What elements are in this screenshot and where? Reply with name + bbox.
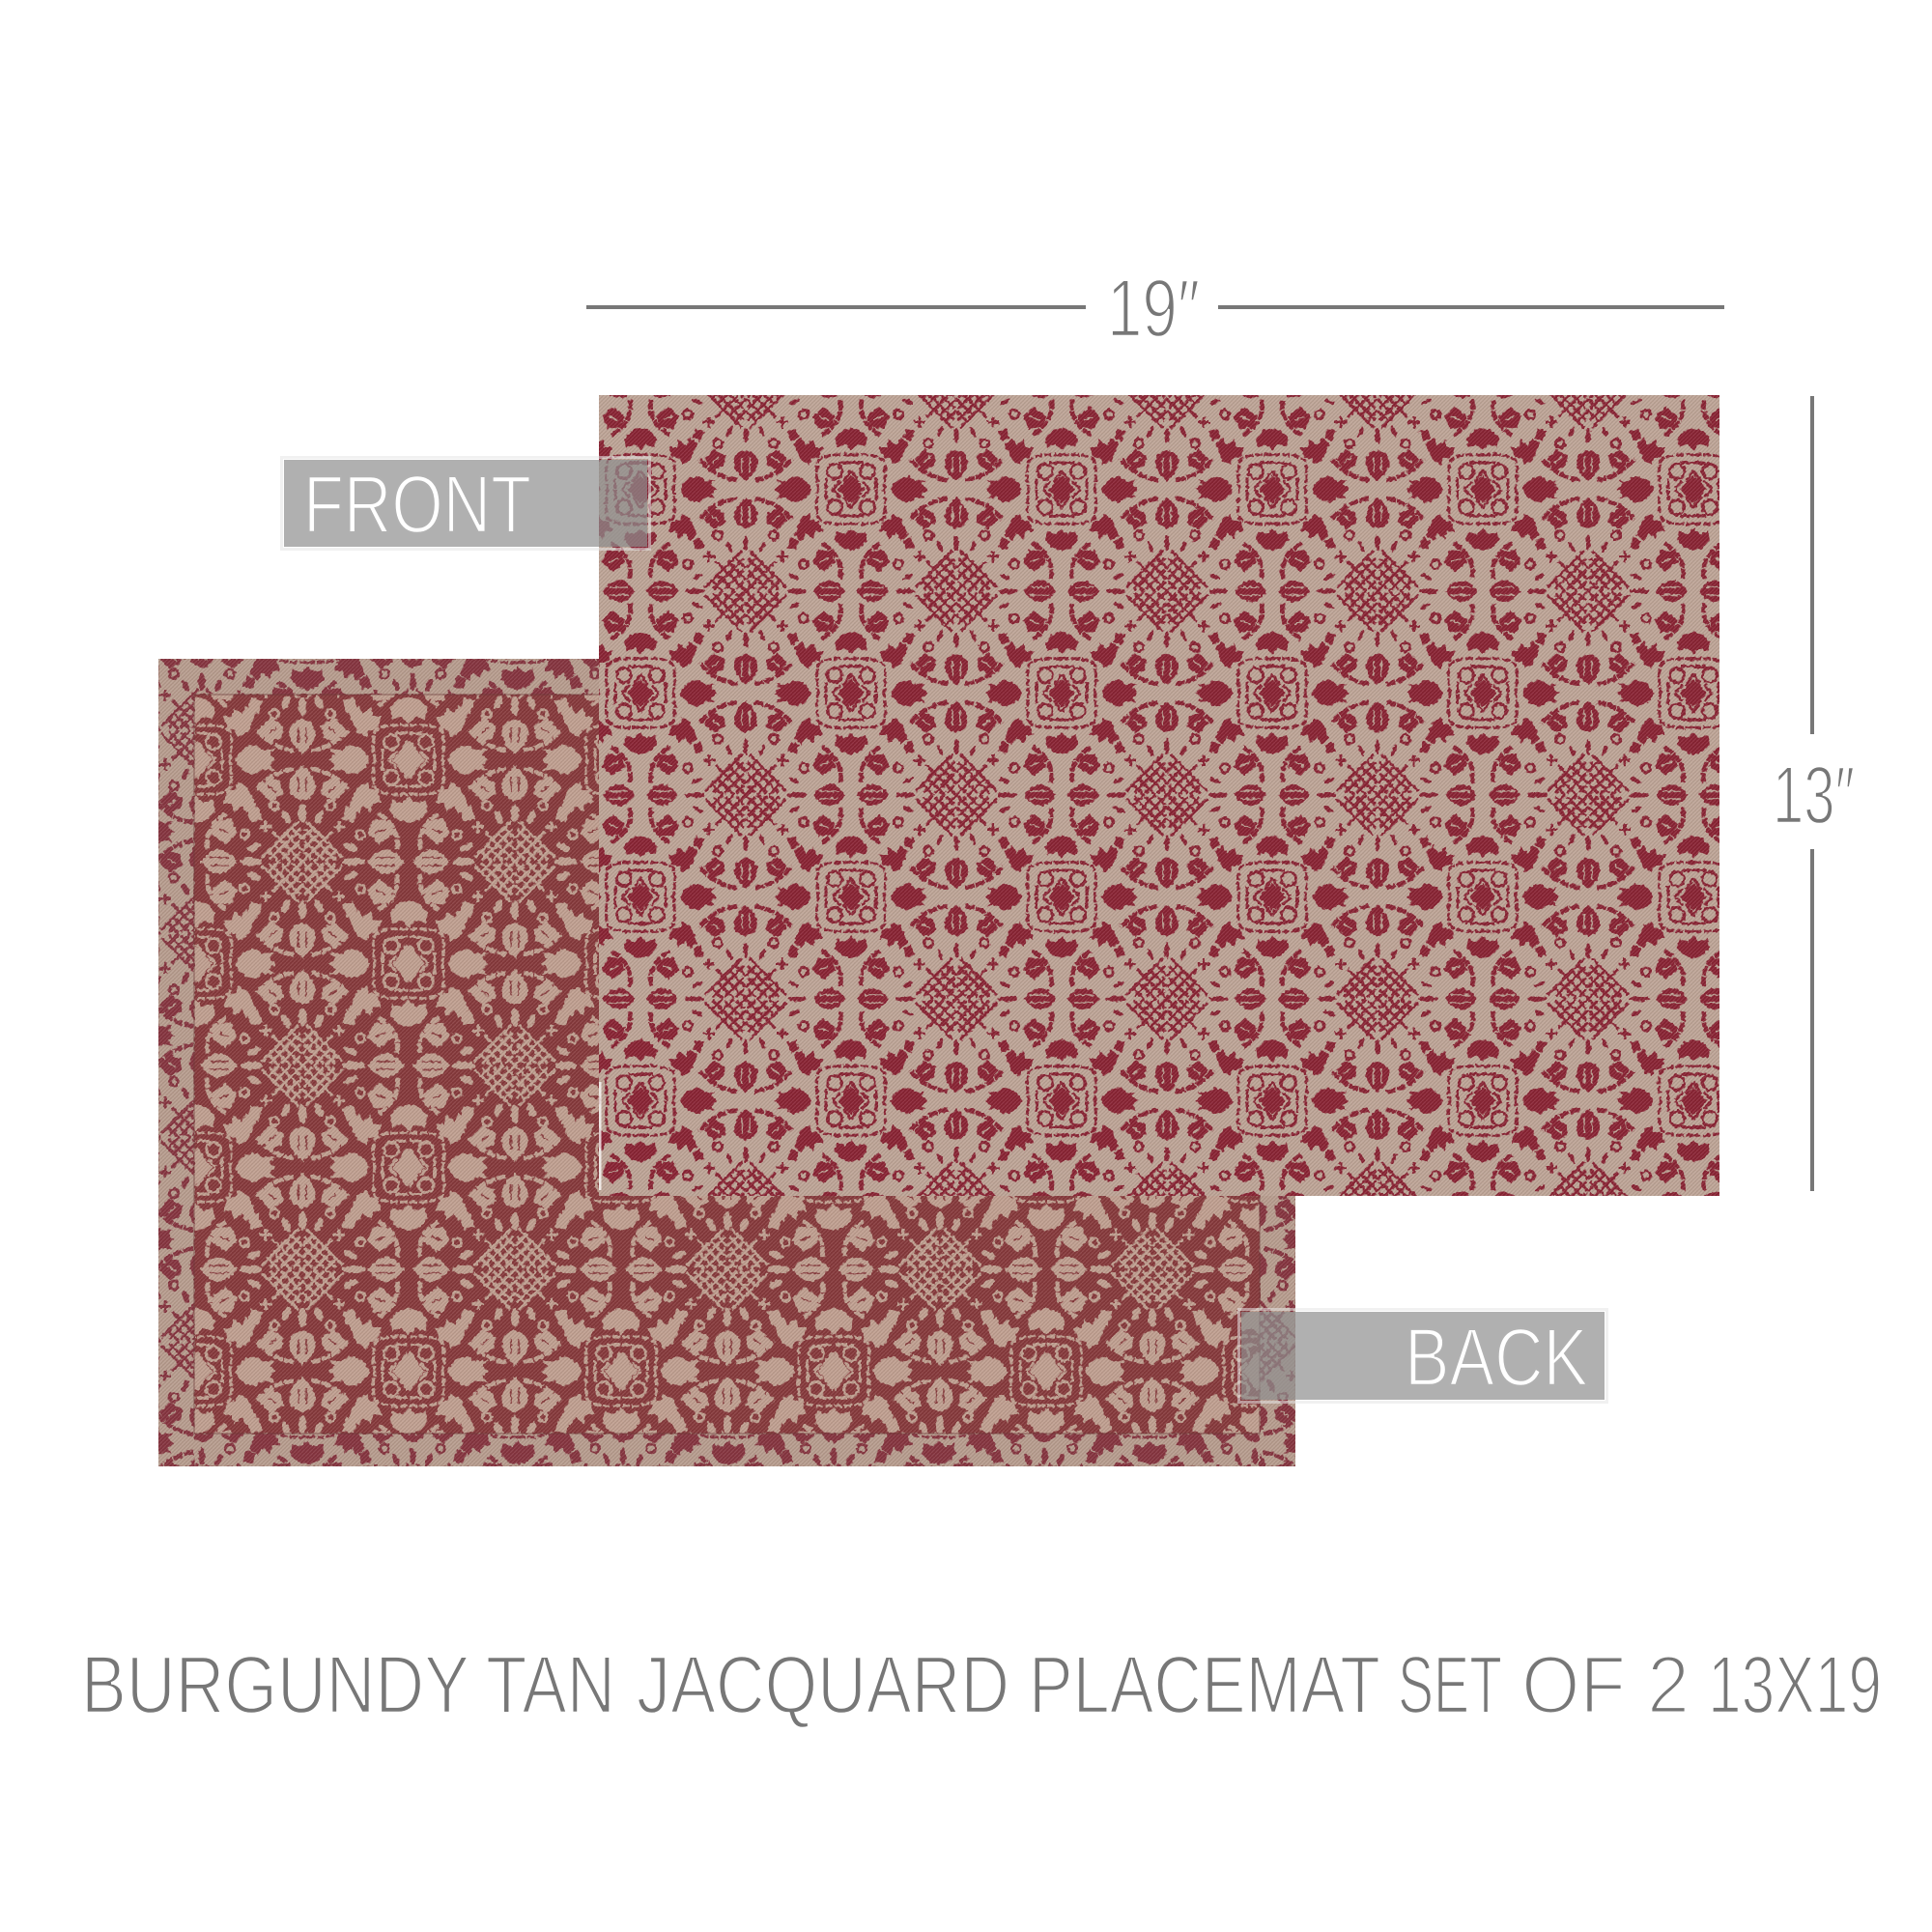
title	[81, 1639, 1882, 1730]
title: OF	[1521, 1639, 1626, 1730]
dimension: width 19 inches: 19″	[1107, 263, 1200, 354]
dimension: width 19 inches	[586, 263, 1724, 354]
title: SET	[1398, 1639, 1502, 1730]
dimension: height 13 inches	[1773, 396, 1855, 1191]
title: JACQUARD	[637, 1639, 1009, 1730]
panel: back placemat	[158, 659, 1295, 1466]
title: TAN	[486, 1639, 615, 1730]
label: back: BACK	[1405, 1312, 1588, 1403]
label: front: FRONT	[303, 459, 531, 550]
panel: front placemat	[591, 387, 1727, 1204]
title: 2	[1647, 1639, 1690, 1730]
dimension: height 13 inches: 13″	[1773, 750, 1855, 840]
label: back	[1238, 1310, 1607, 1403]
title: BURGUNDY	[81, 1639, 469, 1730]
title: PLACEMAT	[1029, 1639, 1380, 1730]
